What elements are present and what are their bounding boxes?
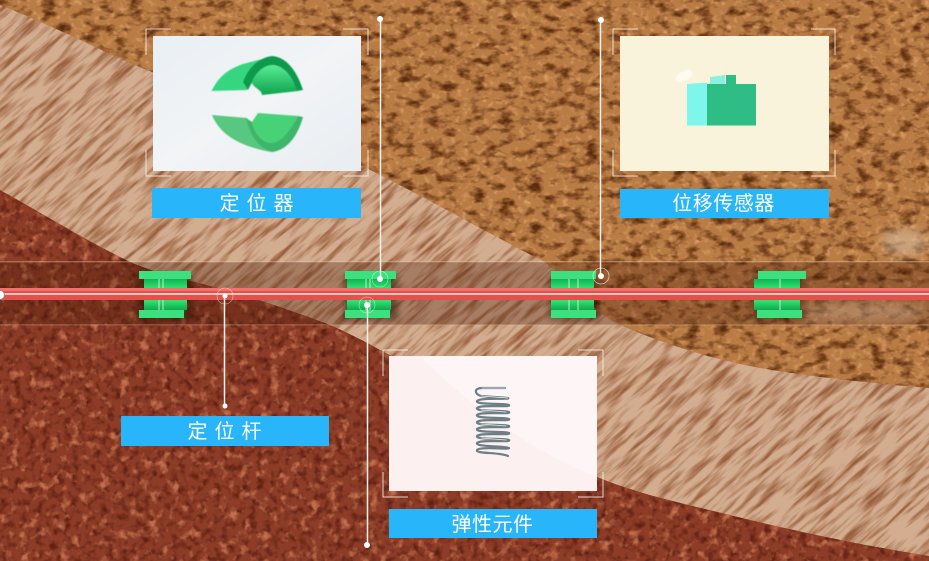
positioner clamp 4: [752, 271, 806, 320]
leader line: elastic element: [359, 297, 375, 548]
leader line: positioning rod: [217, 288, 233, 408]
label: displacement sensor: [620, 189, 829, 218]
label: elastic element: [389, 509, 597, 538]
icon: positioner clamp halves: [212, 56, 303, 152]
label: positioner: [152, 188, 361, 218]
leader line: positioner: [372, 16, 388, 287]
label: positioning rod: [121, 416, 329, 446]
frame corners: [613, 29, 835, 176]
leader line: displacement sensor: [593, 17, 609, 284]
icon: sensor block: [674, 67, 756, 126]
rod end marker: [0, 290, 4, 300]
panel: displacement sensor: [613, 29, 835, 176]
icon: coil spring: [476, 388, 509, 456]
positioner clamp 3: [549, 271, 599, 320]
panel: elastic element: [383, 350, 603, 497]
label: displacement sensor: 位移传感器: [672, 192, 775, 215]
tunnel band: [0, 261, 929, 326]
frame corners: [383, 350, 603, 497]
label: positioner: 定位器: [220, 192, 300, 215]
positioner clamp 1: [138, 271, 192, 320]
frame corners: [146, 29, 368, 176]
label: elastic element: 弹性元件: [452, 513, 534, 536]
positioner clamp 2: [344, 271, 398, 320]
label: positioning rod: 定位杆: [188, 420, 268, 443]
positioning rod: [0, 288, 929, 300]
background: red clay soil layer: [0, 190, 929, 561]
panel: positioner: [146, 29, 368, 176]
